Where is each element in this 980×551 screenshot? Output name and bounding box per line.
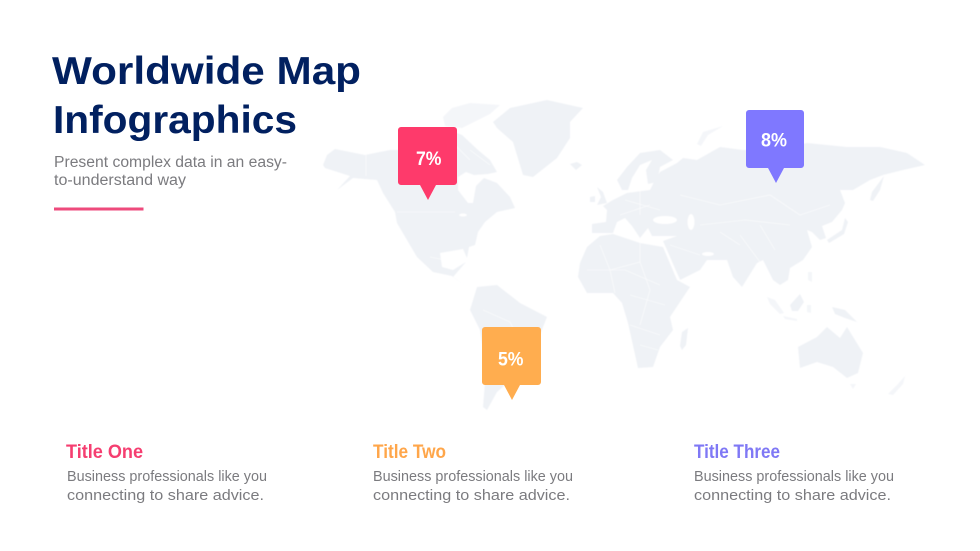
block: title two: Business professionals like you	[373, 468, 573, 485]
map: Sumatra	[767, 297, 784, 314]
block: title three: Title Three	[694, 442, 780, 463]
map: Ireland	[590, 196, 595, 202]
block: title one: connecting to share advice.	[67, 487, 264, 504]
map: Iceland	[570, 162, 582, 170]
map: South America	[470, 285, 547, 410]
map: Novaya Zemlya	[697, 126, 723, 146]
map: Madagascar	[680, 328, 688, 350]
map: Greenland	[493, 100, 583, 177]
map: New Zealand	[888, 376, 905, 395]
block: title two: Title Two	[373, 442, 446, 463]
map: country borders	[366, 135, 830, 352]
map: Eurasia	[592, 143, 925, 287]
map: Philippines	[808, 272, 812, 282]
pin: 7%	[398, 127, 457, 200]
map: United Kingdom	[597, 187, 607, 205]
block: title three	[694, 442, 894, 504]
subtitle: to-understand way	[54, 172, 186, 189]
pin: 5%: 5%	[498, 350, 524, 370]
pin: 7%: 7%	[416, 149, 442, 170]
subtitle	[54, 154, 287, 189]
block: title one: Title One	[66, 442, 143, 463]
map: Arctic islands	[443, 103, 500, 128]
pin: 8%	[746, 110, 804, 183]
block: title two	[373, 442, 573, 504]
map: Java	[783, 316, 797, 321]
accent underline	[54, 208, 144, 210]
block: title two: connecting to share advice.	[373, 487, 570, 504]
map: Tasmania	[850, 384, 856, 389]
block: title three: connecting to share advice.	[694, 487, 891, 504]
title: Infographics	[53, 99, 297, 142]
map: North America	[323, 128, 515, 287]
block: title one: Business professionals like you	[67, 468, 267, 485]
map: Sakhalin	[870, 176, 884, 201]
map: inland seas	[459, 214, 714, 256]
title	[52, 50, 361, 142]
block: title one	[66, 442, 267, 504]
map: Africa	[578, 234, 690, 368]
map: Australia	[798, 327, 863, 378]
map: Borneo	[790, 294, 804, 311]
map: Sulawesi	[807, 305, 811, 313]
title: Worldwide Map	[52, 50, 361, 93]
subtitle: Present complex data in an easy-	[54, 154, 287, 171]
map: Japan	[827, 218, 848, 243]
map: New Guinea	[832, 307, 857, 322]
pin: 8%: 8%	[761, 130, 787, 152]
block: title three: Business professionals like you	[694, 468, 894, 485]
pin: 5%	[482, 327, 541, 400]
world map	[323, 100, 925, 410]
map: Scandinavia and Finland	[617, 150, 673, 190]
